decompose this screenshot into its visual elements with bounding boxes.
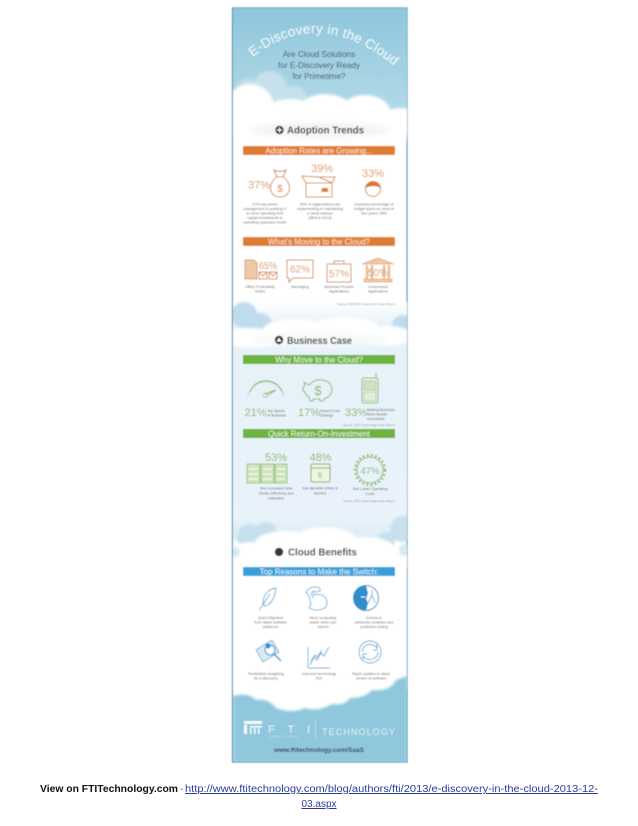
item: messaging bbox=[287, 260, 313, 289]
banner: quick ROI: Quick Return-On-Investment bbox=[268, 430, 371, 438]
stat: racks 53 percent bbox=[247, 452, 293, 500]
stat: 39 percent bbox=[297, 163, 343, 220]
stat: gear 47 percent: See Lower Operating bbox=[353, 487, 387, 491]
website url: www.ftitechnology.com/SaaS bbox=[273, 747, 365, 754]
item: office productivity: 65% bbox=[259, 261, 277, 272]
benefit: rapid updates bbox=[352, 641, 390, 680]
logo: FTI Technology: CONSULTING bbox=[269, 734, 298, 738]
stat: 33 percent: budget spent on cloud in bbox=[354, 207, 394, 211]
item: messaging: 62% bbox=[290, 264, 310, 276]
item: governance bbox=[362, 258, 394, 294]
stat: phone 33 percent: More Mobile bbox=[367, 412, 387, 416]
subtitle bbox=[278, 50, 361, 81]
benefit: advanced analytics: Access to bbox=[366, 616, 382, 620]
section: cloud benefits bbox=[243, 546, 395, 680]
benefit: quick migration: Quick Migration bbox=[258, 616, 283, 620]
item: governance: Governance bbox=[368, 285, 388, 289]
benefit: advanced analytics: predictive coding bbox=[360, 625, 388, 629]
stat: gauge 21 percent: of Business bbox=[267, 414, 286, 418]
stat: calendar 48 percent: See Benefits Within 6 bbox=[302, 486, 338, 490]
stat: 37 percent: capital investments to bbox=[247, 216, 283, 220]
stat: 37 percent: operating expenses model bbox=[243, 220, 287, 224]
stat: piggy bank 17 percent bbox=[298, 380, 340, 419]
footer source link: View on FTITechnology.com bbox=[40, 784, 178, 795]
heading: business case: Business Case bbox=[287, 335, 352, 347]
section background: business case bbox=[233, 302, 407, 540]
benefit: quick migration bbox=[254, 588, 287, 629]
panel: infographic bbox=[231, 6, 408, 764]
source note: Source: CDC Cloud Usage Index Report bbox=[343, 499, 395, 503]
stat: piggy bank 17 percent: 17% bbox=[298, 407, 320, 419]
benefit: computing power: need it bbox=[317, 625, 329, 629]
item: business process: Business Process bbox=[324, 285, 354, 289]
item: office productivity bbox=[245, 260, 277, 294]
source note: Source: CDC Cloud Usage Index Report bbox=[343, 423, 395, 427]
stat: phone 33 percent: 33% bbox=[345, 407, 367, 419]
benefit: computing power bbox=[306, 587, 336, 629]
cloud: cloud benefits cloud bbox=[224, 516, 416, 690]
stat: 39 percent: (88% in 2015) bbox=[309, 216, 331, 220]
section: business case bbox=[243, 335, 395, 503]
footer source link: 03.aspx bbox=[301, 799, 337, 810]
benefit: rapid updates: version of software bbox=[356, 676, 386, 680]
subtitle: for E-Discovery Ready bbox=[278, 61, 361, 70]
stat: racks 53 percent: Utilization bbox=[268, 496, 284, 500]
stat: calendar 48 percent: Months bbox=[314, 492, 326, 496]
benefit: computing power: power when you bbox=[310, 620, 336, 624]
stat: racks 53 percent: 53% bbox=[265, 452, 287, 464]
item: office productivity: Office Productivity bbox=[245, 285, 275, 289]
banner: what's moving bbox=[243, 237, 395, 246]
stat: 33 percent bbox=[354, 168, 394, 216]
stat: 39 percent: 39% bbox=[311, 163, 333, 175]
stat: 39 percent: implementing or maintaining bbox=[297, 207, 343, 211]
benefit: predictable budgeting bbox=[248, 640, 284, 680]
benefit: advanced analytics bbox=[354, 586, 393, 629]
banner: why move bbox=[243, 355, 395, 364]
stat: 37 percent: 37% bbox=[248, 180, 270, 192]
footer source link: http://www.ftitechnology.com/blog/authors/fti/2013/e-discovery-in-the-cloud-2013-12- bbox=[185, 784, 598, 795]
footer source link bbox=[40, 784, 598, 810]
banner: quick ROI bbox=[243, 429, 395, 438]
banner: why move: Why Move to the Cloud? bbox=[275, 356, 363, 364]
stat: 39 percent: a cloud solution bbox=[307, 212, 333, 216]
footer source link: - bbox=[180, 784, 183, 795]
stat: 39 percent: 39% of organizations are bbox=[300, 202, 340, 206]
stat: 37 percent: $ bbox=[277, 184, 283, 195]
stat: 37 percent: to move spending from bbox=[246, 212, 284, 216]
stat: gauge 21 percent: Top Speed bbox=[267, 409, 285, 413]
stat: piggy bank 17 percent: $ bbox=[314, 383, 322, 398]
stat: gauge 21 percent bbox=[244, 381, 286, 419]
banner: adoption rates: Adoption Rates are Growing... bbox=[265, 146, 373, 156]
stat: gear 47 percent: Costs bbox=[365, 492, 375, 496]
stat: 33 percent: Expected percentage of bbox=[355, 202, 394, 206]
cloud: top header cloud bbox=[226, 71, 422, 142]
stat: 37 percent bbox=[243, 170, 289, 224]
banner: what's moving: What's Moving to the Cloud? bbox=[268, 238, 371, 246]
heading: cloud benefits: Cloud Benefits bbox=[288, 546, 357, 558]
benefit: computing power: More computing bbox=[310, 616, 336, 620]
item: business process: Applications bbox=[329, 290, 349, 294]
stat: gear 47 percent bbox=[353, 455, 387, 496]
subtitle: for Primetime? bbox=[292, 72, 346, 81]
item: office productivity: Suites bbox=[255, 290, 265, 294]
stat: 33 percent: 33% bbox=[362, 168, 384, 180]
item: governance: Applications bbox=[368, 290, 388, 294]
stat: piggy bank 17 percent: Savings bbox=[320, 414, 333, 418]
item: business process bbox=[324, 261, 354, 294]
stat: calendar 48 percent bbox=[302, 452, 338, 496]
logo: FTI Technology: TECHNOLOGY bbox=[322, 727, 395, 737]
stat: racks 53 percent: See Increased Data bbox=[260, 486, 293, 490]
stat: racks 53 percent: Center Efficiency and bbox=[259, 492, 293, 496]
stat: 33 percent: four years: 28% bbox=[361, 212, 388, 216]
stat: phone 33 percent bbox=[345, 373, 395, 421]
logo: FTI Technology bbox=[244, 720, 395, 738]
stat: piggy bank 17 percent: Expect Cost bbox=[320, 409, 340, 413]
benefit: predictable budgeting: Predictable budgeting bbox=[248, 672, 284, 676]
source note: Source: 2012/2013 State of the Cloud Report bbox=[337, 302, 395, 306]
title: E-Discovery in the Cloud bbox=[248, 24, 400, 66]
heading: adoption trends: Adoption Trends bbox=[287, 124, 364, 136]
stat: phone 33 percent: Making Business bbox=[367, 408, 395, 412]
item: business process: 57% bbox=[329, 269, 349, 280]
subtitle: Are Cloud Solutions bbox=[283, 50, 355, 59]
benefit: predictable budgeting: for a discovery bbox=[254, 676, 278, 680]
banner: top reasons: Top Reasons to Make the Switch: bbox=[260, 568, 378, 576]
benefit: improved ROI bbox=[302, 647, 336, 680]
benefit: improved ROI: ROI bbox=[316, 676, 322, 680]
stat: 37 percent: 37% say senior bbox=[252, 202, 278, 206]
stat: gear 47 percent: 47% bbox=[360, 466, 380, 477]
stat: calendar 48 percent: 48% bbox=[309, 452, 332, 464]
benefit: advanced analytics: advanced analytics and bbox=[355, 620, 393, 624]
benefit: quick migration: platforms bbox=[263, 625, 278, 629]
footer sky bbox=[233, 676, 407, 762]
stat: gauge 21 percent: 21% bbox=[244, 407, 267, 419]
section: adoption trends bbox=[243, 124, 395, 306]
item: messaging: Messaging bbox=[291, 285, 309, 289]
benefit: rapid updates: Rapid updates to latest bbox=[352, 672, 390, 676]
cloud: business case cloud bbox=[222, 302, 414, 348]
stat: 37 percent: management is pushing IT bbox=[243, 207, 287, 211]
benefit: improved ROI: Improved technology bbox=[302, 672, 336, 676]
logo: FTI Technology: F T I bbox=[268, 724, 310, 736]
banner: adoption rates bbox=[243, 146, 395, 156]
item: governance: 50% bbox=[368, 268, 388, 279]
benefit: quick migration: from dated software bbox=[254, 620, 287, 624]
stat: calendar 48 percent: 6 bbox=[318, 471, 323, 480]
stat: phone 33 percent: Accessible bbox=[367, 417, 385, 421]
